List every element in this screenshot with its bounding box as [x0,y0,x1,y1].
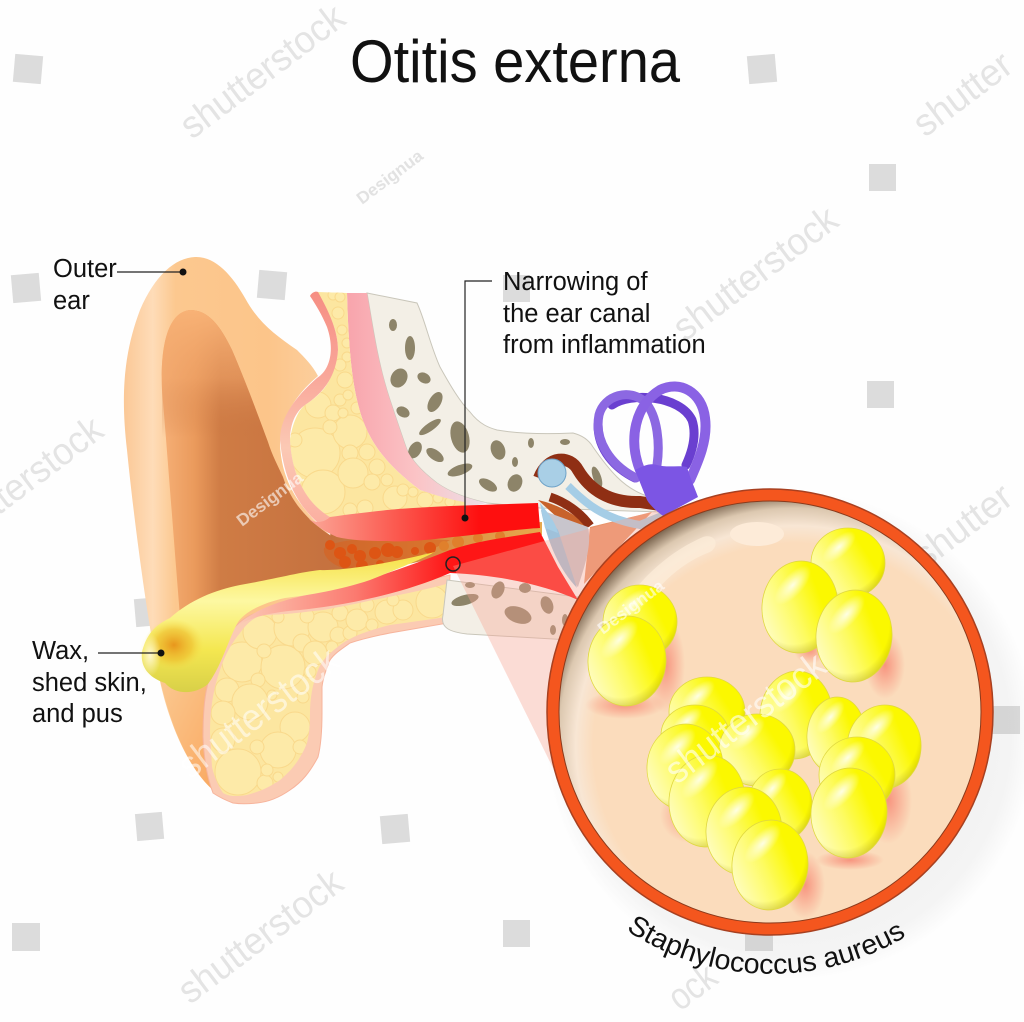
watermark: shutter [905,43,1021,145]
canal lumen band [330,522,542,580]
watermark: ock [660,955,726,1019]
bacteria shadows [585,617,912,919]
fat upper [290,292,464,517]
skin upper [280,292,340,537]
bacteria [584,526,925,913]
label: wax, shed skin, and pus: and pus [32,700,123,728]
semicircular canals [598,386,706,480]
ear lobe [160,680,215,790]
bone pores [387,319,605,494]
ear cavity [162,310,345,640]
zoom cone [453,508,665,768]
highlight [598,536,716,671]
bone upper [367,293,660,512]
watermark: shutterstock [665,198,847,349]
muscle [347,293,487,508]
label: Staphylococcus aureus: Staphylococcus aureus [629,916,904,974]
bone lower [442,579,578,640]
label: outer ear: ear [53,287,90,315]
label: wax, shed skin, and pus: Wax, [32,637,89,665]
upper ear canal [307,503,540,541]
earwax debris [324,531,505,572]
fat lower [205,580,455,800]
outer ear [124,257,345,790]
label: narrowing of the ear canal [446,268,706,571]
label: outer ear: Outer [53,255,117,283]
label: narrowing of the ear canal: the ear canal [503,300,650,328]
middle ear [538,459,662,588]
title: Otitis externa [350,28,681,95]
circle shadow [545,490,1024,980]
label: narrowing of the ear canal: from inflammation [503,331,706,359]
watermark over art [170,468,835,792]
watermark over art: shutterstock [170,639,348,787]
label: outer ear [53,255,186,315]
label: narrowing of the ear canal: Narrowing of [503,268,648,296]
lower skin and fat [203,575,455,804]
label: wax, shed skin, and pus [32,637,164,728]
lower ear canal [238,532,578,625]
watermark over art: Designua [233,468,307,530]
watermark: Designua [353,146,427,208]
watermark: shutterstock [170,861,352,1012]
magnifier circle [547,489,993,935]
watermark over art: shutterstock [657,644,835,792]
label: wax, shed skin, and pus: shed skin, [32,669,147,697]
watermark over art: Designua [594,576,668,638]
vestibule [635,464,698,516]
watermark: shutter [905,475,1021,577]
wax plug [139,552,435,692]
